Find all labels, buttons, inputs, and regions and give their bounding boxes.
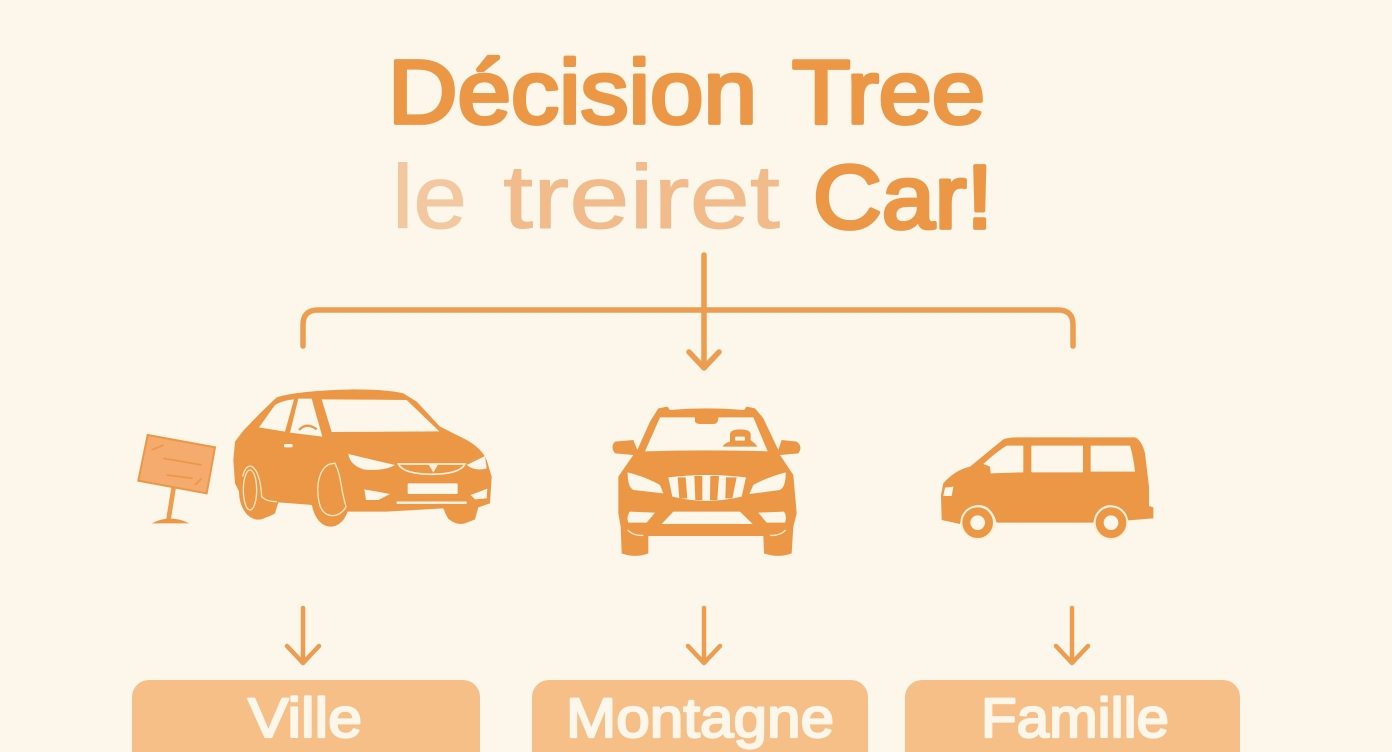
bumper lights [627, 512, 655, 523]
grille [668, 475, 746, 501]
windshield [645, 417, 768, 451]
SUV body [612, 407, 800, 556]
arrow: to Ville [287, 608, 319, 663]
label: Ville: Ville [248, 686, 362, 749]
icon: sedan car [233, 389, 492, 527]
tyres [239, 464, 278, 520]
title line 1: Tree [792, 43, 985, 143]
label: Montagne: Montagne [566, 686, 834, 749]
van wheels [961, 506, 994, 539]
title line 2: treiret [503, 148, 780, 248]
label: Famille: Famille [981, 686, 1169, 749]
wheel outlines [243, 466, 277, 502]
title line 1 [388, 43, 985, 143]
tree connector: bracket and central arrow [303, 255, 1073, 368]
headlights [628, 472, 663, 493]
windows [259, 399, 294, 432]
label: Famille [905, 680, 1240, 752]
icon: family van [941, 437, 1153, 539]
van windows [983, 446, 1023, 473]
title line 2: Car! [813, 148, 993, 248]
title line 1: Décision [388, 43, 757, 143]
label: Montagne [532, 680, 868, 752]
arrow: to Famille [1056, 608, 1088, 663]
lights, grille and plate [348, 454, 395, 470]
icon: SUV front view [612, 407, 800, 556]
title line 2 [392, 148, 993, 248]
mirror figure [723, 429, 758, 447]
title [388, 43, 993, 248]
label: Ville [132, 680, 480, 752]
icon: road sign [138, 435, 215, 523]
arrow: to Montagne [688, 608, 720, 663]
van body [941, 437, 1153, 524]
car body [233, 389, 492, 525]
title line 2: le [392, 148, 467, 248]
